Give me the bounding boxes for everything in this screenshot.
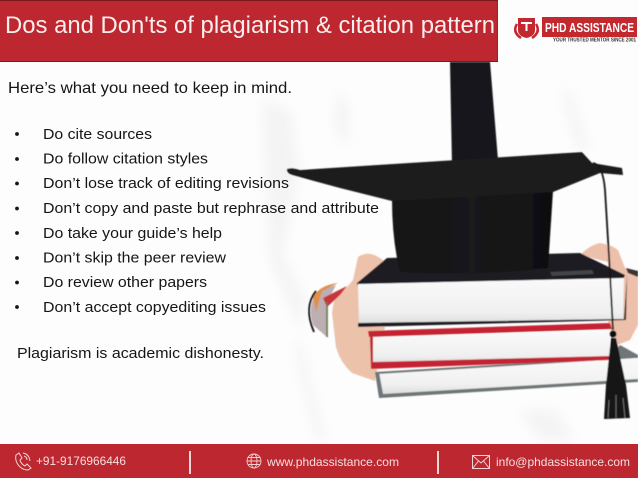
item: review papers: Do review other papers [43, 274, 207, 291]
bracelets [309, 283, 347, 338]
icon: globe [247, 454, 261, 468]
item: citation styles: Do follow citation styles [43, 150, 208, 168]
intro text: Here’s what you need to keep in mind. [8, 80, 292, 97]
icon: envelope [472, 456, 490, 468]
title text: Dos and Don'ts of plagiarism & citation pattern [5, 12, 495, 39]
bullet list [15, 126, 379, 316]
logo: PHD Assistance [515, 17, 637, 44]
red book [368, 323, 612, 369]
divider [437, 451, 439, 474]
closing statement: Plagiarism is academic dishonesty. [17, 345, 264, 362]
right hand [580, 243, 638, 345]
website: www.phdassistance.com [266, 455, 399, 469]
item: cite sources: Do cite sources [43, 126, 152, 143]
photo: student in white shirt holding books and cap [262, 62, 638, 440]
divider [189, 451, 191, 474]
black book [357, 253, 627, 327]
graduation cap [287, 152, 623, 273]
logo emblem [515, 18, 538, 38]
title bar [0, 0, 498, 62]
footer bar [0, 444, 638, 478]
icon: phone [16, 453, 31, 470]
item: copy and paste: Don’t copy and paste but rephrase and attribute [43, 200, 379, 217]
grey book [375, 345, 638, 398]
item: editing revisions: Don’t lose track of editing revisions [43, 175, 289, 192]
left hand and forearm [332, 254, 390, 381]
shirt shading [262, 90, 590, 440]
watch strap [626, 268, 638, 277]
item: guide's help: Do take your guide’s help [43, 225, 222, 242]
item: peer review: Don’t skip the peer review [43, 250, 226, 266]
item: copyediting: Don’t accept copyediting issues [43, 299, 266, 316]
logo wordmark box [542, 17, 637, 37]
email: info@phdassistance.com [496, 455, 630, 469]
phone number: +91-9176966446 [36, 454, 126, 468]
tassel [593, 163, 630, 419]
tie [450, 62, 498, 165]
